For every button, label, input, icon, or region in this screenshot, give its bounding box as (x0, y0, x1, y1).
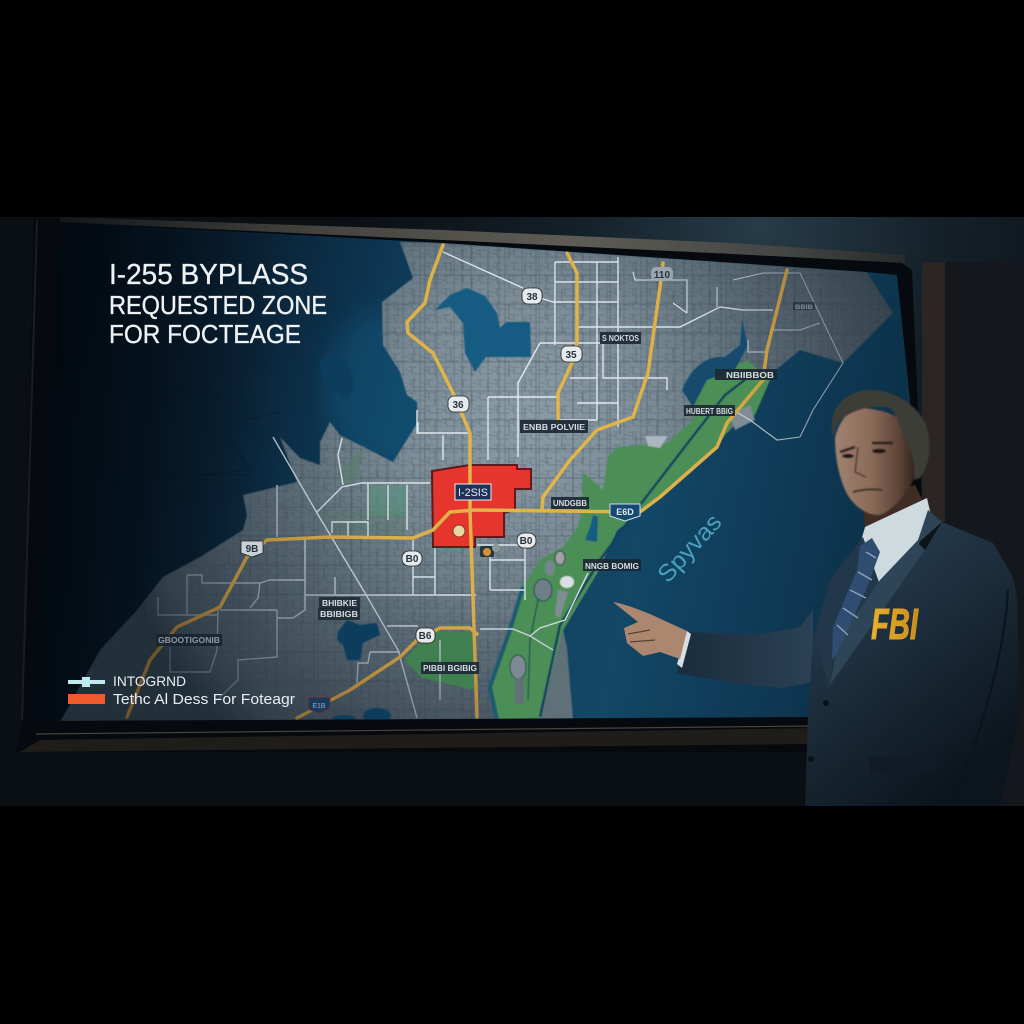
map lakes (320, 288, 531, 724)
map parks (313, 320, 770, 720)
road shields: E6D (616, 507, 634, 517)
jacket pocket and buttons (808, 700, 935, 774)
road shields: 36 (452, 400, 464, 411)
map screen (53, 225, 910, 721)
presenter pointing hand (613, 602, 687, 659)
sea label Spyvas: Spyvas (652, 509, 727, 588)
legend zone swatch (68, 694, 105, 704)
traffic signal marker (480, 544, 500, 557)
road name labels: BBIB (795, 305, 814, 311)
map land (60, 242, 893, 722)
faint drowned contours (220, 404, 280, 476)
road shields: B0 (406, 554, 419, 565)
title (110, 264, 326, 344)
road name labels: UNDGBB (553, 499, 587, 508)
road name labels: BBIBIGB (320, 610, 358, 619)
road name labels: NNGB BOMIG (585, 562, 639, 571)
room wall (0, 217, 1024, 806)
title: REQUESTED ZONE (109, 290, 327, 320)
wall column beside monitor (922, 262, 945, 522)
legend: Tethc Al Dess For Foteagr (113, 691, 295, 708)
presenter head (832, 390, 929, 515)
road name labels (156, 302, 815, 674)
zone label I-2SIS: I-2SIS (458, 487, 488, 499)
road shields (241, 267, 673, 714)
presenter shirt (832, 498, 932, 665)
infographic scene (0, 217, 1024, 806)
FBI badge text: FBI (871, 600, 919, 649)
road shields: B6 (419, 631, 432, 642)
zone label I-2SIS (455, 484, 491, 500)
legend: INTOGRND (113, 673, 186, 689)
road shields: B0 (520, 536, 533, 547)
map water (53, 225, 910, 721)
road name labels: ENBB POLVIIE (523, 423, 586, 432)
wall panel behind presenter (945, 262, 1024, 806)
lit water glow (322, 310, 418, 461)
presenter jacket (805, 522, 1020, 806)
bottom letterbox band (0, 806, 1024, 1024)
top letterbox band (0, 0, 1024, 217)
road shields: 35 (565, 350, 577, 361)
title: I-255 BYPLASS (109, 259, 308, 291)
presenter tie (832, 538, 880, 660)
road shields: E1B (312, 703, 326, 710)
presenter arm (677, 610, 813, 688)
left water shade (33, 222, 228, 721)
map highways (127, 245, 787, 718)
presenter cuff (677, 631, 691, 668)
presenter neck (862, 485, 925, 552)
zone marker (453, 525, 465, 537)
road name labels: BHIBKIE (322, 599, 358, 608)
road shields: 110 (654, 270, 671, 281)
presenter (613, 390, 1020, 806)
road name labels: S NOKTOS (602, 334, 640, 343)
road shields: 9B (246, 544, 258, 555)
road name labels: GBOOTIGONIB (158, 636, 220, 645)
map side streets (158, 252, 843, 718)
road name labels: NBIIBBOB (726, 371, 774, 380)
road name labels: HUBERT BBIG (686, 407, 733, 416)
monitor frame (16, 217, 922, 752)
requested zone red highlight (432, 465, 531, 547)
legend (68, 676, 295, 707)
road shields: 38 (526, 292, 538, 303)
road name labels: PIBBI BGIBIG (423, 664, 477, 673)
legend line swatch (68, 677, 105, 687)
title: FOR FOCTEAGE (109, 319, 301, 349)
presenter hair (832, 390, 929, 480)
